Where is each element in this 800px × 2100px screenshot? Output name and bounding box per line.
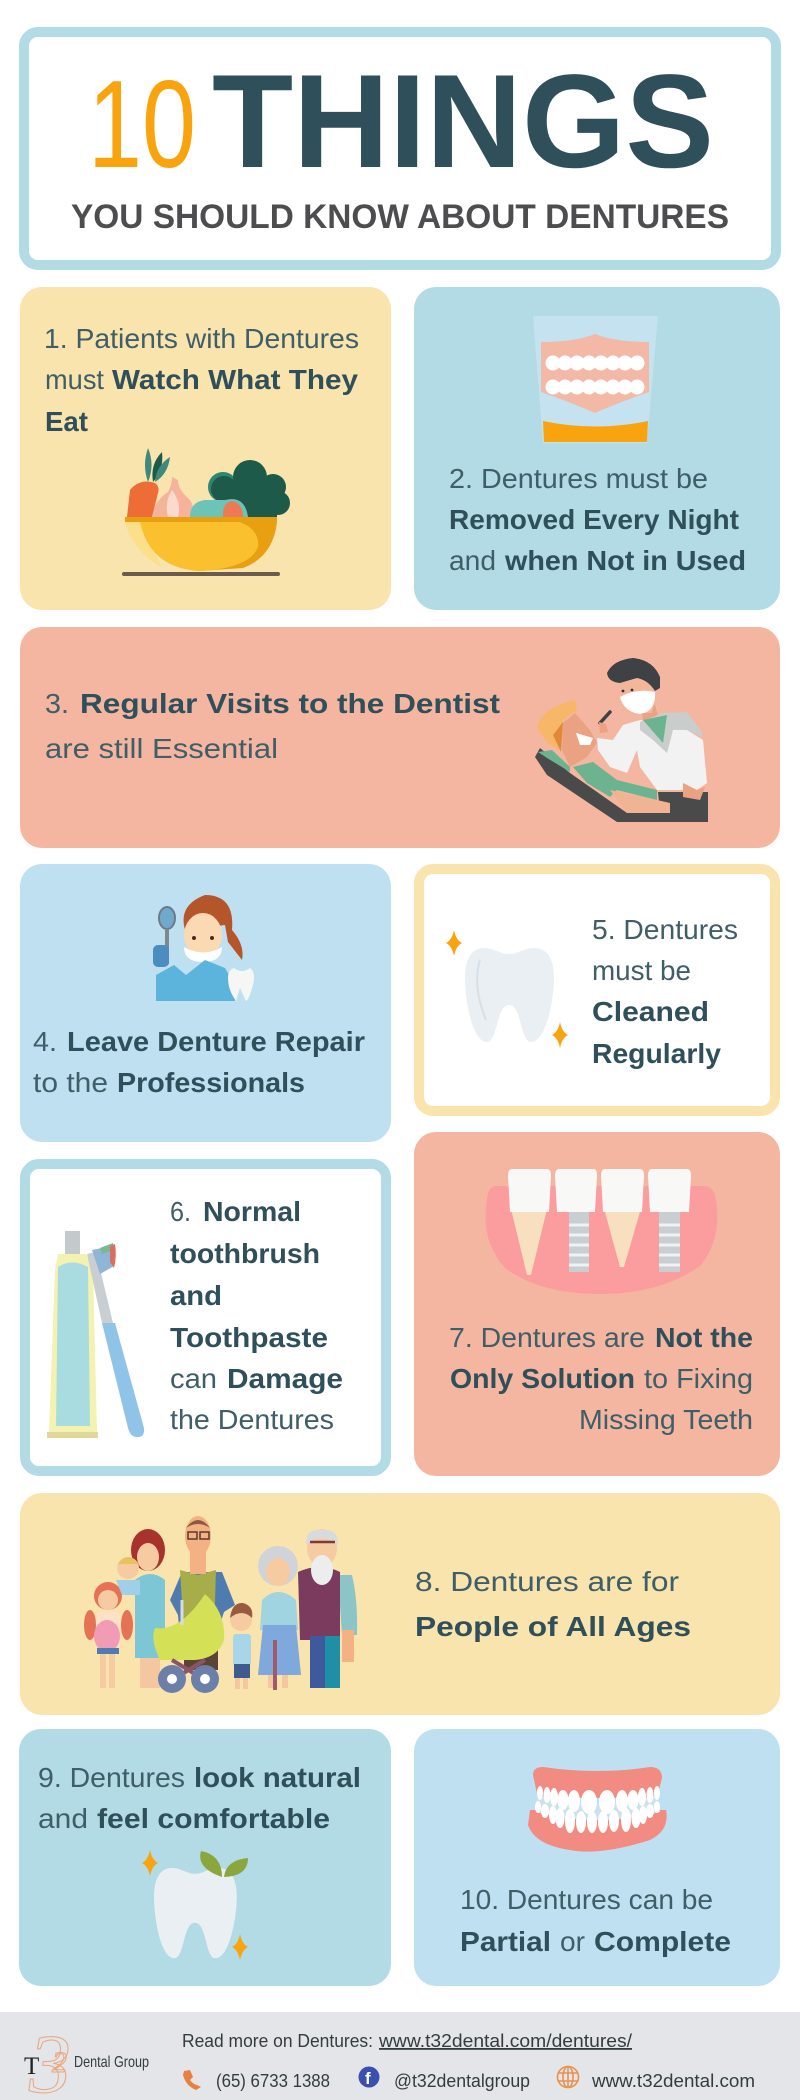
text: item 6: the Dentures <box>170 1404 334 1435</box>
text: item 4: Professionals <box>117 1067 305 1098</box>
panel 4: leave repair to professionals <box>20 864 391 1142</box>
text: item 5: 5. Dentures <box>592 914 738 945</box>
text: item 7 <box>449 1322 753 1435</box>
panel: title header <box>24 32 776 265</box>
dentist <box>597 658 707 790</box>
panel 3: regular visits <box>20 627 780 848</box>
panel 10: partial or complete <box>414 1729 780 1986</box>
text: item 6: Normal <box>203 1196 301 1227</box>
text: item 9 <box>38 1762 361 1834</box>
teeth <box>535 1786 660 1833</box>
icon: tooth with leaves <box>142 1850 248 1960</box>
panel 6: toothbrush and toothpaste <box>25 1164 386 1471</box>
text: item 10 <box>460 1884 731 1957</box>
text: item 7: Not the <box>655 1322 753 1353</box>
footer <box>0 2012 800 2100</box>
text: item 6: Damage <box>227 1363 343 1394</box>
text: item 2: when Not in Used <box>504 545 746 576</box>
fish slice <box>190 499 248 517</box>
text: item 3 <box>45 688 500 764</box>
text: item 7: to Fixing <box>644 1363 753 1394</box>
carrot <box>127 448 170 517</box>
text: item 10: 10. Dentures can be <box>460 1884 713 1915</box>
text: item 5: Cleaned <box>592 996 709 1027</box>
icon: facebook <box>358 2066 380 2088</box>
text: item 10: Complete <box>594 1926 731 1957</box>
text: item 5 <box>592 914 738 1069</box>
panel 7: not the only solution <box>414 1132 780 1476</box>
text: item 9: feel comfortable <box>97 1803 330 1834</box>
text: website: www.t32dental.com <box>591 2071 755 2091</box>
text: item 7: 7. Dentures are <box>449 1322 645 1353</box>
icon: teeth and implants <box>485 1169 717 1294</box>
text: item 8: People of All Ages <box>415 1611 691 1642</box>
text: item 3: are still Essential <box>45 733 278 764</box>
icon: clean tooth <box>446 930 568 1048</box>
text: item 7: Missing Teeth <box>579 1404 753 1435</box>
icon: phone <box>183 2070 201 2090</box>
icon: family <box>84 1516 357 1693</box>
text: item 6: can <box>170 1363 217 1394</box>
text: item 9: 9. Dentures <box>38 1762 185 1793</box>
text: item 6: Toothpaste <box>170 1322 328 1353</box>
text: item 2: and <box>449 545 496 576</box>
text: item 3: 3. <box>45 688 69 719</box>
figure: stroller <box>153 1594 224 1693</box>
logo: T32 Dental Group: T <box>24 2053 39 2080</box>
text: item 6: and <box>170 1280 222 1311</box>
title: THINGS: THINGS <box>212 48 714 196</box>
text: item 7: Only Solution <box>450 1363 635 1394</box>
text: item 1: Eat <box>45 406 88 437</box>
text: item 9: and <box>38 1803 88 1834</box>
text: item 2: 2. Dentures must be <box>449 463 708 494</box>
text: item 9: look natural <box>194 1762 361 1793</box>
icon: food bowl <box>122 448 290 576</box>
text: item 1: Watch What They <box>112 364 358 395</box>
icon: globe <box>558 2066 578 2088</box>
broccoli <box>208 460 290 518</box>
bowl <box>125 517 277 571</box>
icon: full dentures <box>528 1767 667 1852</box>
text: item 6: toothbrush <box>170 1238 320 1269</box>
text: item 5: Regularly <box>592 1038 721 1069</box>
panel 1: watch what they eat <box>20 287 391 610</box>
text: item 1: must <box>45 364 104 395</box>
panel 5: cleaned regularly <box>419 869 775 1111</box>
text: item 2 <box>449 463 746 576</box>
text: phone number: (65) 6733 1388 <box>216 2071 330 2091</box>
logo: T32 Dental Group: Dental Group <box>74 2054 149 2071</box>
text: read more line <box>182 2031 632 2051</box>
subtitle: YOU SHOULD KNOW ABOUT DENTURES <box>71 198 729 236</box>
figure: father <box>170 1516 235 1670</box>
text: item 6: 6. <box>170 1196 191 1227</box>
text: item 6 <box>170 1196 343 1435</box>
logo: T32 Dental Group: 2 <box>52 2046 67 2079</box>
figure: girl <box>84 1582 133 1688</box>
text: item 4: Leave Denture Repair <box>67 1026 365 1057</box>
text: item 10: Partial <box>460 1926 551 1957</box>
figure: grandfather <box>298 1529 357 1688</box>
text: item 2: Removed Every Night <box>449 504 739 535</box>
text: item 1 <box>44 323 359 437</box>
figure: boy <box>230 1603 252 1689</box>
onion <box>152 477 194 517</box>
icon: toothpaste and toothbrush <box>47 1231 144 1438</box>
icon: facebook: f <box>365 2069 371 2088</box>
logo: T32 Dental Group <box>24 2018 149 2100</box>
dental chair <box>535 748 708 822</box>
text: read more line: www.t32dental.com/dentures/ <box>378 2031 632 2051</box>
panel 8: people of all ages <box>20 1493 780 1715</box>
text: facebook handle: @t32dentalgroup <box>394 2071 530 2091</box>
text: item 4 <box>33 1026 365 1098</box>
text: item 4: 4. <box>33 1026 57 1057</box>
panel 2: remove every night <box>414 287 780 610</box>
text: read more line: Read more on Dentures: <box>182 2031 373 2051</box>
figure: grandmother <box>258 1546 301 1690</box>
text: item 8: 8. Dentures are for <box>415 1566 679 1597</box>
text: item 1: 1. Patients with Dentures <box>44 323 359 354</box>
panel 9: look natural <box>19 1729 391 1986</box>
figure: mother and baby <box>116 1529 165 1688</box>
text: item 5: must be <box>592 955 691 986</box>
icon: dentist and patient <box>535 658 708 822</box>
title: 10: 10 <box>88 56 196 194</box>
icon: dentures in glass <box>533 316 658 443</box>
text: item 3: Regular Visits to the Dentist <box>80 688 500 719</box>
patient <box>537 700 670 813</box>
text: item 10: or <box>560 1926 585 1957</box>
text: item 8 <box>415 1566 691 1642</box>
text: item 4: to the <box>33 1067 108 1098</box>
icon: dental assistant <box>153 895 254 1001</box>
